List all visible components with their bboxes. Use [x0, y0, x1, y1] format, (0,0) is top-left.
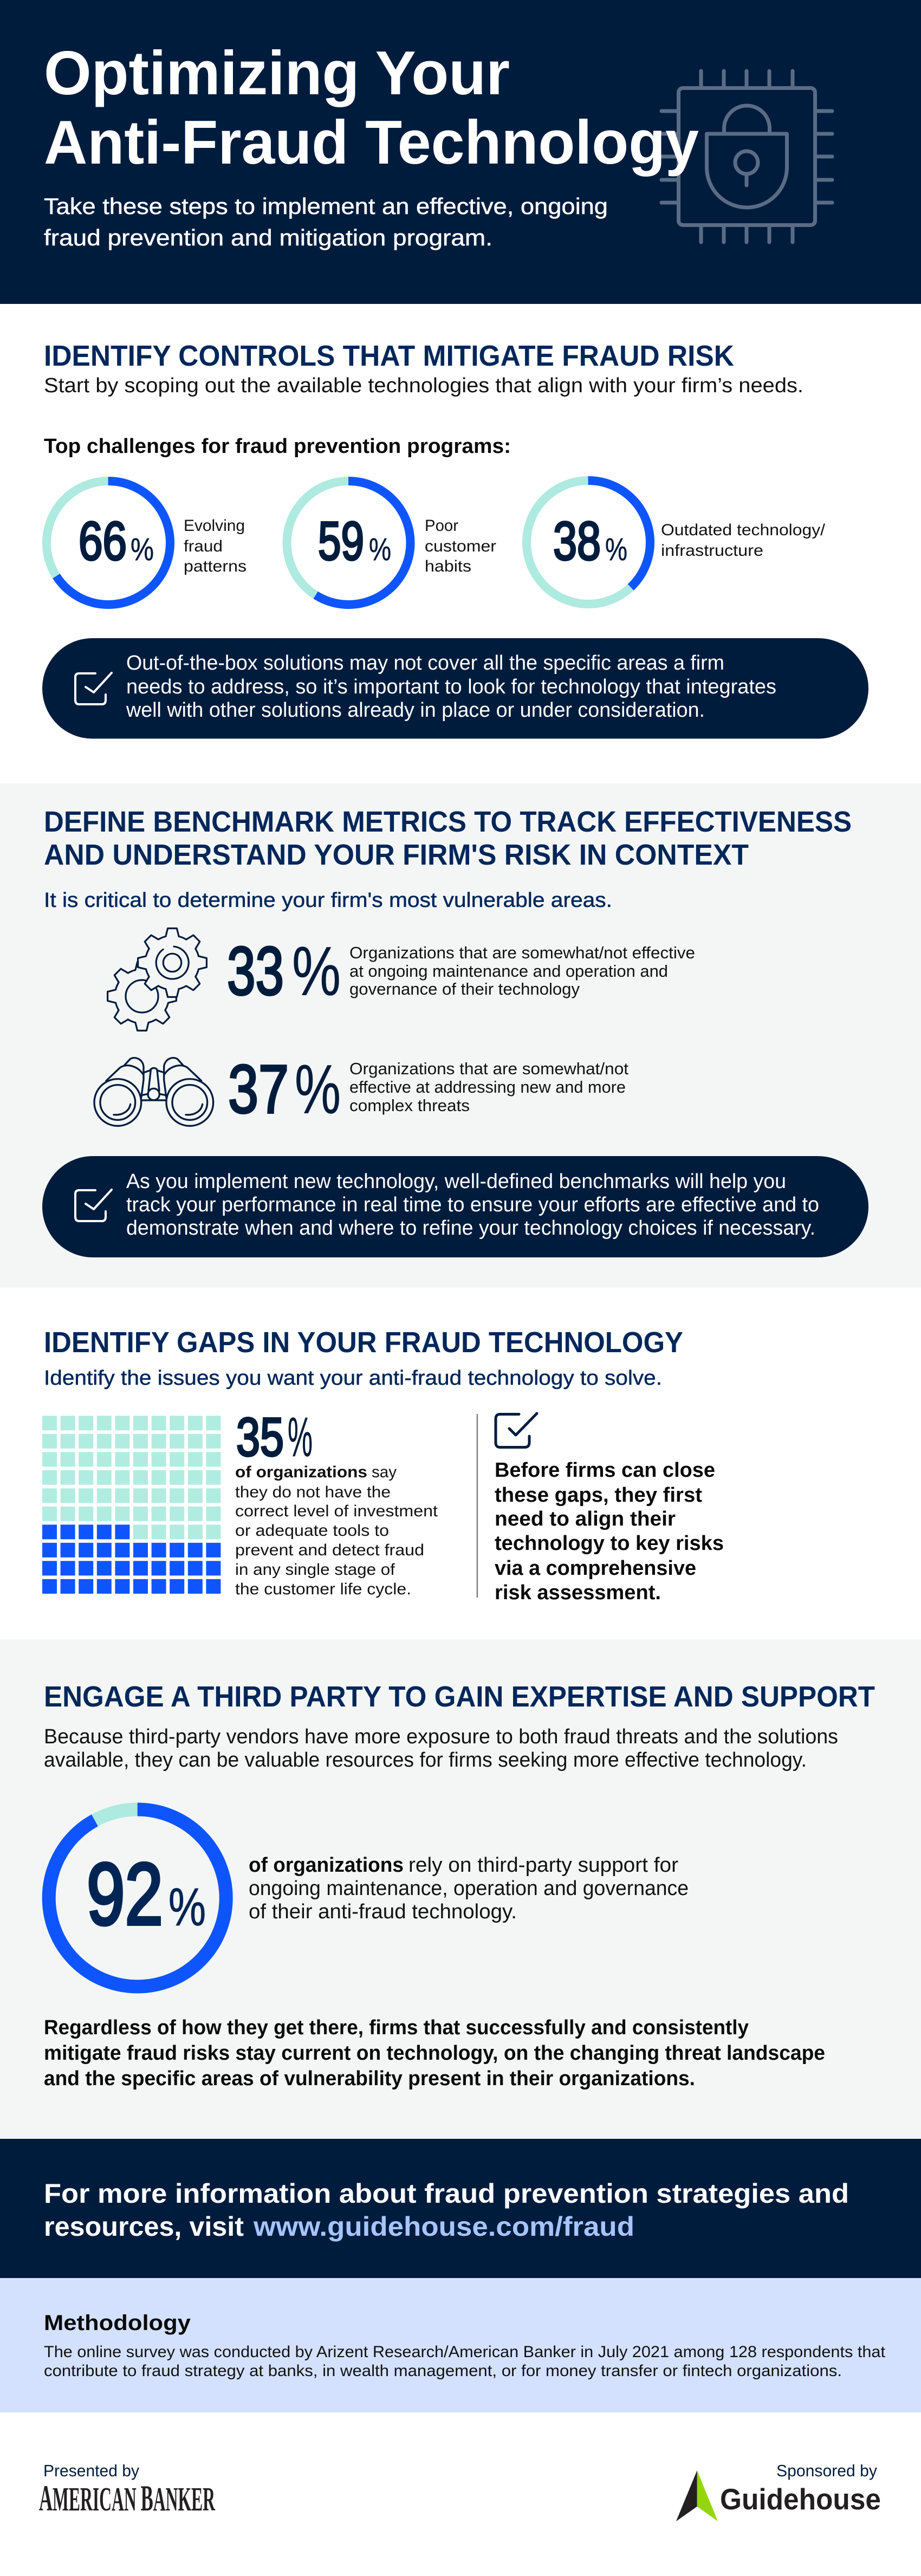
title: Anti-Fraud Technology [44, 108, 699, 177]
icon: checkbox [75, 1190, 112, 1221]
donut chart: 38%: % [605, 532, 627, 567]
stat: 37% [228, 1051, 341, 1128]
donut chart: 59%: % [369, 532, 391, 567]
stat text: complex threats: effective at addressing new and more [349, 1078, 626, 1096]
panel: engage a third party [0, 1639, 921, 2139]
intro text: Because third-party vendors have more exposure to both fraud threats and the solutions [44, 1725, 838, 1748]
callout text [126, 652, 776, 722]
logo: Guidehouse wordmark: Guidehouse [720, 2482, 881, 2516]
stat text: 35% of organizations: they do not have the [235, 1483, 391, 1501]
intro text: Identify the issues you want your anti-fraud technology to solve. [44, 1367, 662, 1390]
logo: Guidehouse arrow [676, 2470, 718, 2521]
stat text: ongoing maintenance [349, 943, 695, 998]
heading: define benchmark metrics: DEFINE BENCHMARK METRICS TO TRACK EFFECTIVENESS [44, 806, 852, 838]
stat text: 35% of organizations: say [372, 1463, 397, 1481]
stat text: ongoing maintenance: governance of their technology [349, 979, 580, 998]
methodology text: contribute to fraud strategy at banks, in wealth management, or for money transfer or fintech organizations. [44, 2362, 842, 2380]
text: align technology to key risks: Before firms can close [495, 1459, 715, 1482]
stat text: 35% of organizations: prevent and detect fraud [235, 1541, 424, 1559]
stat: 37%: 37 [228, 1051, 289, 1127]
stat: 33%: 33 [227, 933, 284, 1009]
intro text: available, they can be valuable resources for firms seeking more effective technology. [44, 1749, 807, 1772]
title: Optimizing Your [44, 39, 510, 108]
stat text: complex threats [349, 1059, 628, 1115]
logo: American Banker: AMERICAN BANKER [39, 2477, 216, 2519]
callout text: well with other solutions already in place or under consideration. [126, 699, 705, 722]
label: outdated technology: Outdated technology/ [661, 521, 826, 539]
methodology text [44, 2343, 886, 2380]
label: evolving fraud patterns: patterns [184, 557, 247, 575]
callout: well-defined benchmarks [42, 1156, 868, 1257]
panel: define benchmark metrics [0, 783, 921, 1288]
text: closing statement: and the specific areas of vulnerability present in their organizations. [44, 2067, 695, 2090]
text: align technology to key risks [495, 1459, 724, 1604]
label: evolving fraud patterns [184, 517, 247, 575]
stat text: 35% of organizations: of organizations [235, 1463, 367, 1481]
stat: 37%: % [295, 1051, 341, 1128]
stat text: complex threats: Organizations that are somewhat/not [349, 1059, 628, 1078]
stat text: 92% of organizations: of their anti-fraud technology. [249, 1900, 517, 1923]
donut chart: 92% [49, 1809, 226, 1987]
text: closing statement: Regardless of how they get there, firms that successfully and consistently [44, 2016, 749, 2039]
subtitle: Take these steps to implement an effective, ongoing [44, 193, 608, 219]
text: more information [44, 2178, 849, 2242]
callout text [126, 1170, 819, 1240]
stat text: 35% of organizations [235, 1463, 438, 1598]
callout text: Out-of-the-box solutions may not cover all the specific areas a firm [126, 652, 724, 674]
panel: identify controls [42, 340, 868, 739]
callout text: demonstrate when and where to refine your technology choices if necessary. [126, 1217, 815, 1240]
subtitle: fraud prevention and mitigation program. [44, 225, 492, 250]
stat text: 35% of organizations: or adequate tools to [235, 1522, 389, 1540]
text: more information: www.guidehouse.com/fraud [253, 2211, 634, 2242]
heading: engage a third party: ENGAGE A THIRD PARTY TO GAIN EXPERTISE AND SUPPORT [44, 1680, 875, 1713]
label: evolving fraud patterns: Evolving [184, 517, 245, 535]
text: align technology to key risks: these gaps, they first [495, 1484, 702, 1507]
stat text: 92% of organizations: ongoing maintenance, operation and governance [249, 1877, 689, 1900]
label: outdated technology [661, 521, 826, 560]
label: poor customer habits: habits [425, 557, 471, 575]
callout text: As you implement new technology, well-defined benchmarks will help you [126, 1170, 786, 1193]
stat text: 92% of organizations [249, 1854, 689, 1923]
donut chart: 66% [47, 481, 170, 605]
label: poor customer habits: Poor [425, 517, 458, 535]
label: poor customer habits: customer [425, 537, 496, 555]
donut chart: 38% [527, 481, 650, 604]
panel: identify gaps [42, 1326, 724, 1604]
intro text: It is critical to determine your firm's most vulnerable areas. [44, 889, 612, 912]
donut chart: 59%: 59 [318, 511, 364, 572]
text: align technology to key risks: need to align their [495, 1508, 676, 1530]
icon: gears [108, 929, 206, 1030]
heading: identify controls: IDENTIFY CONTROLS THAT MITIGATE FRAUD RISK [44, 340, 734, 372]
label: evolving fraud patterns: fraud [184, 537, 223, 555]
text: closing statement [44, 2016, 825, 2090]
stat: 33%: % [292, 933, 341, 1010]
donut chart: 59% [287, 481, 411, 605]
panel: methodology [0, 2278, 921, 2412]
stat: 35%: % [288, 1406, 313, 1468]
methodology text: The online survey was conducted by Arizent Research/American Banker in July 2021 among 128 respondents that [44, 2343, 886, 2361]
text: align technology to key risks: risk assessment. [495, 1581, 661, 1604]
stat text: 35% of organizations: correct level of investment [235, 1502, 438, 1520]
label: sponsored by: Sponsored by [776, 2461, 877, 2480]
donut chart: 92%: 92 [87, 1845, 163, 1943]
stat text: ongoing maintenance: at ongoing maintenance and operation and [349, 962, 668, 981]
stat text: ongoing maintenance: Organizations that are somewhat/not effective [349, 943, 695, 962]
stat text: 35% of organizations: in any single stage of [235, 1561, 395, 1579]
heading: define benchmark metrics: AND UNDERSTAND YOUR FIRM'S RISK IN CONTEXT [44, 839, 749, 871]
text: more information: resources, visit [44, 2211, 244, 2242]
donut chart: 66%: 66 [79, 511, 127, 572]
heading: methodology: Methodology [44, 2311, 191, 2335]
intro text: Start by scoping out the available technologies that align with your firm’s needs. [44, 374, 803, 397]
subheading: top challenges: Top challenges for fraud prevention programs: [44, 435, 511, 458]
label: poor customer habits [425, 517, 496, 575]
stat text: 92% of organizations: rely on third-party support for [408, 1854, 678, 1877]
title [44, 39, 699, 177]
subtitle [44, 193, 608, 250]
stat: 35%: 35 [236, 1407, 284, 1468]
donut chart: 66%: % [131, 532, 154, 567]
label: presented by: Presented by [43, 2461, 139, 2480]
waffle chart: 35 of 100 [42, 1416, 220, 1594]
stat text: complex threats: complex threats [349, 1096, 470, 1115]
text: align technology to key risks: via a comprehensive [495, 1557, 696, 1580]
callout text: needs to address, so it’s important to look for technology that integrates [126, 676, 776, 698]
heading: define benchmark metrics [44, 806, 852, 871]
callout: out-of-the-box solutions [42, 638, 868, 739]
panel: sponsored by [676, 2461, 881, 2521]
icon: checkbox [75, 673, 112, 704]
icon: binoculars [94, 1058, 213, 1126]
panel: presented by [39, 2461, 216, 2519]
stat text: 35% of organizations: the customer life cycle. [235, 1580, 411, 1598]
stat text: 92% of organizations: of organizations [249, 1854, 404, 1877]
panel: call to action [0, 2139, 921, 2278]
stat: 33% [227, 933, 341, 1010]
icon: chip with padlock [661, 71, 832, 242]
panel: header [0, 0, 921, 304]
text: align technology to key risks: technology to key risks [495, 1532, 724, 1555]
text: more information: For more information about fraud prevention strategies and [44, 2178, 849, 2209]
intro text [44, 1725, 838, 1772]
donut chart: 92%: % [168, 1877, 206, 1937]
text: closing statement: mitigate fraud risks stay current on technology, on the changing threat landscape [44, 2042, 825, 2065]
label: outdated technology: infrastructure [661, 542, 763, 560]
callout text: track your performance in real time to ensure your efforts are effective and to [126, 1193, 819, 1216]
icon: checkbox [496, 1413, 537, 1448]
heading: identify gaps: IDENTIFY GAPS IN YOUR FRAUD TECHNOLOGY [44, 1326, 683, 1359]
donut chart: 38%: 38 [553, 511, 601, 572]
